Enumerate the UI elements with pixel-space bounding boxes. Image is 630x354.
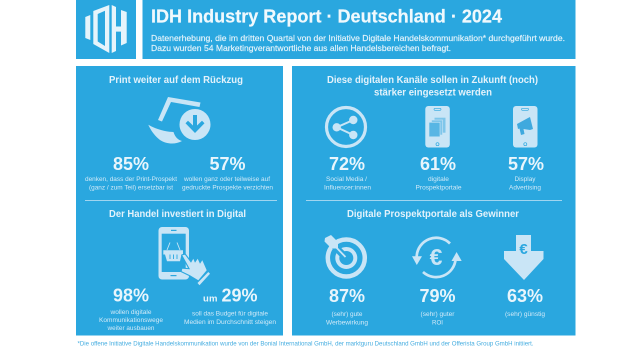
stat: 61%: digitale (428, 176, 449, 183)
stat: 79%: (sehr) guter (420, 311, 455, 318)
stat: 79% (419, 286, 456, 326)
intro text (151, 33, 565, 53)
icon: euro cycle: € (430, 244, 443, 270)
stat: 57% display: Display (514, 176, 536, 183)
stat: 29%: Medien im Durchschnitt steigen (184, 319, 276, 326)
stat: 57% display: 57% (508, 154, 544, 174)
stat: 57% (182, 154, 273, 192)
icon: target (324, 235, 365, 276)
stat: 85%: (ganz / zum Teil) ersetzbar ist (89, 184, 173, 192)
stat: 57%: wollen ganz oder teilweise auf (183, 176, 270, 183)
icon: down arrow with euro (504, 235, 544, 280)
stat: 85% (85, 154, 177, 192)
icon: print prospect with download (148, 97, 212, 144)
heading: digital channels: stärker eingesetzt werden (374, 88, 492, 99)
stat: 61% (416, 154, 462, 191)
stat: 63%: 63% (507, 286, 543, 306)
stat: 61%: 61% (420, 154, 456, 174)
stat: 72%: Influencer:innen (324, 184, 371, 191)
heading: prospect portals: Digitale Prospektportale als Gewinner (347, 209, 519, 220)
stat: 98% (99, 286, 163, 332)
stat: 61%: Prospektportale (416, 184, 462, 191)
icon: euro cycle (412, 238, 462, 277)
heading: print: Print weiter auf dem Rückzug (109, 75, 243, 86)
stat: 87%: 87% (329, 286, 365, 306)
icon: phone with basket and hand (158, 227, 210, 285)
stat: 98%: weiter ausbauen (107, 325, 155, 332)
stat: 57% display (508, 154, 544, 191)
panel: header (142, 0, 576, 59)
stat: 98%: 98% (113, 286, 149, 306)
stat: 63%: (sehr) günstig (505, 311, 545, 318)
stat: 85%: 85% (113, 154, 149, 174)
icon: phone with brochures (425, 106, 450, 148)
panel: left (76, 66, 283, 336)
intro text: Datenerhebung, die im dritten Quartal von der Initiative Digitale Handelskommunikation* durchgeführt wurde. (151, 33, 565, 43)
stat: 72%: 72% (329, 154, 365, 174)
icon: share (326, 108, 366, 146)
stat: 98%: wollen digitale (110, 309, 152, 316)
stat: 87% (326, 286, 368, 326)
stat: 29%: soll das Budget für digitale (192, 311, 268, 318)
stat: 63% (505, 286, 545, 318)
stat: 29% (184, 286, 276, 326)
stat: 29%: 29% (222, 286, 258, 306)
stat: 57%: 57% (209, 154, 246, 174)
stat: 29%: um (203, 294, 218, 304)
stat: 57% display: Advertising (509, 184, 541, 191)
stat: 57%: gedruckte Prospekte verzichten (182, 184, 273, 192)
intro text: Dazu wurden 54 Marketingverantwortliche aus allen Handelsbereichen befragt. (151, 43, 451, 53)
panel: logo (76, 0, 136, 59)
stat: 85%: denken, dass der Print-Prospekt (85, 176, 177, 183)
heading: digital investment: Der Handel investiert in Digital (109, 209, 246, 220)
icon: phone with megaphone (513, 106, 538, 148)
stat: 79%: ROI (432, 320, 443, 326)
title: IDH Industry Report · Deutschland · 2024 (151, 6, 503, 26)
stat: 87%: (sehr) gute (332, 311, 363, 318)
icon: down arrow with euro: € (519, 241, 528, 258)
stat: 72%: Social Media / (326, 176, 367, 183)
stat: 72% (324, 154, 371, 191)
heading: digital channels (327, 75, 538, 99)
stat: 87%: Werbewirkung (326, 320, 368, 326)
heading: digital channels: Diese digitalen Kanäle sollen in Zukunft (noch) (327, 75, 538, 86)
footnote: *Die offene Initiative Digitale Handelskommunikation wurde von der Bonial International GmbH, der marktguru Deutschland GmbH und der Offerista Group GmbH initiiert. (78, 341, 534, 348)
stat: 98%: Kommunikationswege (99, 317, 163, 324)
panel: right (292, 66, 576, 336)
stat: 79%: 79% (419, 286, 456, 306)
